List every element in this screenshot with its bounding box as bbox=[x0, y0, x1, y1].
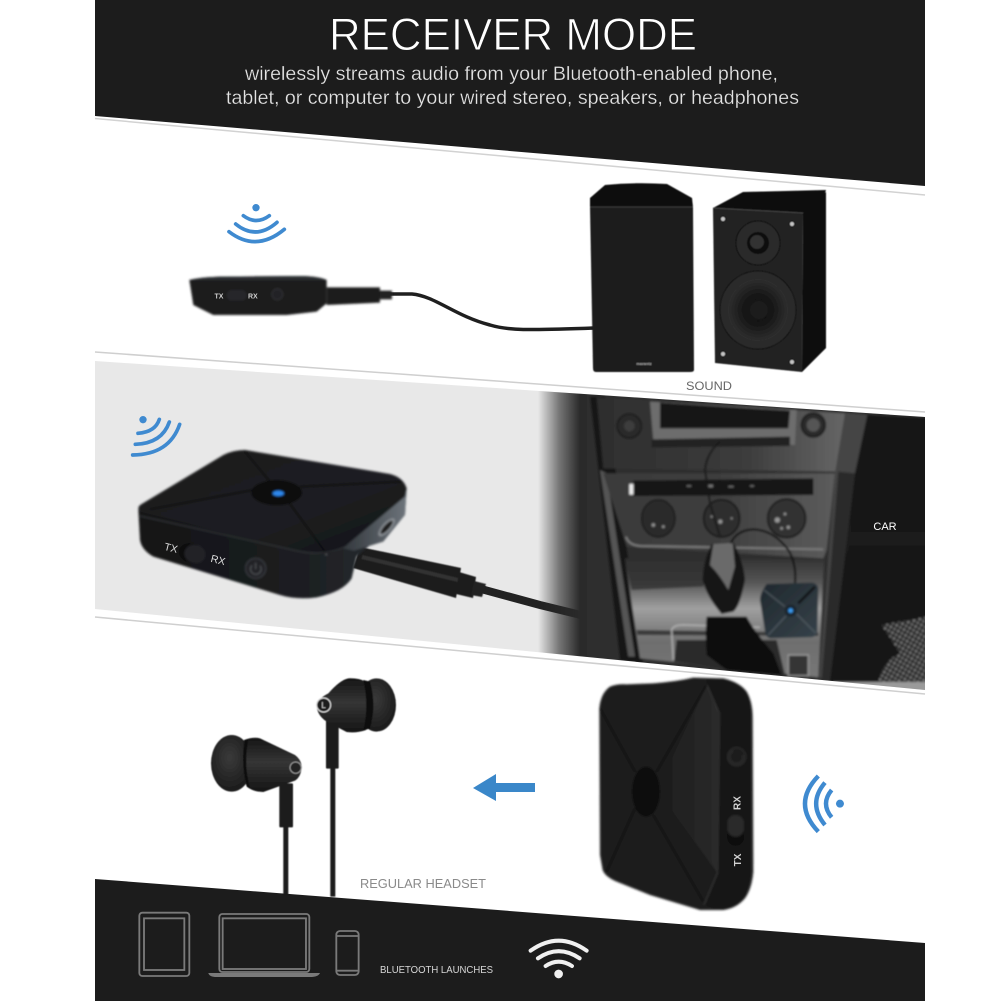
device labels RX TX: RX bbox=[732, 796, 744, 810]
bottom band bbox=[95, 879, 925, 1001]
device labels TX RX: RX bbox=[248, 294, 258, 300]
grey panel background bbox=[95, 361, 925, 690]
compact receiver device bbox=[189, 276, 392, 315]
car interior photo bbox=[540, 391, 925, 690]
icon: laptop bbox=[208, 914, 320, 977]
icon: phone bbox=[336, 931, 359, 975]
transmitter device front view bbox=[599, 678, 753, 910]
active speaker with drivers bbox=[713, 190, 826, 372]
device labels RX TX: TX bbox=[733, 853, 744, 866]
headset label: REGULAR HEADSET bbox=[360, 877, 486, 891]
icon: tablet bbox=[139, 913, 189, 976]
sound label: SOUND bbox=[686, 379, 732, 393]
speaker cable bbox=[372, 294, 595, 330]
icon: blue wireless signal bbox=[805, 776, 844, 832]
device labels TX RX: TX bbox=[214, 294, 224, 300]
title: RECEIVER MODE bbox=[329, 9, 697, 60]
icon: blue wireless signal bbox=[229, 204, 284, 242]
jack cable bbox=[482, 586, 578, 618]
panel: speaker scene bbox=[189, 183, 826, 393]
subtitle bbox=[226, 63, 799, 109]
device labels TX RX: RX bbox=[209, 553, 227, 568]
icon: white wireless signal bbox=[531, 941, 587, 978]
device labels TX RX: TX bbox=[163, 541, 179, 556]
panel: car scene bbox=[95, 361, 940, 717]
bluetooth launches label: BLUETOOTH LAUNCHES bbox=[380, 964, 493, 976]
subtitle: wirelessly streams audio from your Bluetooth-enabled phone, bbox=[244, 63, 778, 85]
arrow bbox=[473, 774, 535, 801]
device labels TX RX bbox=[214, 294, 258, 300]
device labels TX RX bbox=[163, 541, 227, 568]
main receiver device bbox=[138, 450, 407, 598]
icon: blue wireless signal bbox=[133, 416, 180, 455]
header band bbox=[95, 0, 925, 195]
passive speaker bbox=[590, 183, 694, 372]
panel: headset scene bbox=[95, 678, 925, 1001]
earphones: L bbox=[321, 701, 326, 710]
car label: CAR bbox=[873, 521, 897, 533]
earphones bbox=[211, 678, 396, 897]
passive speaker: marantz bbox=[636, 361, 652, 366]
jack barrel bbox=[353, 547, 486, 598]
device labels RX TX bbox=[732, 796, 744, 866]
subtitle: tablet, or computer to your wired stereo, speakers, or headphones bbox=[226, 87, 799, 109]
